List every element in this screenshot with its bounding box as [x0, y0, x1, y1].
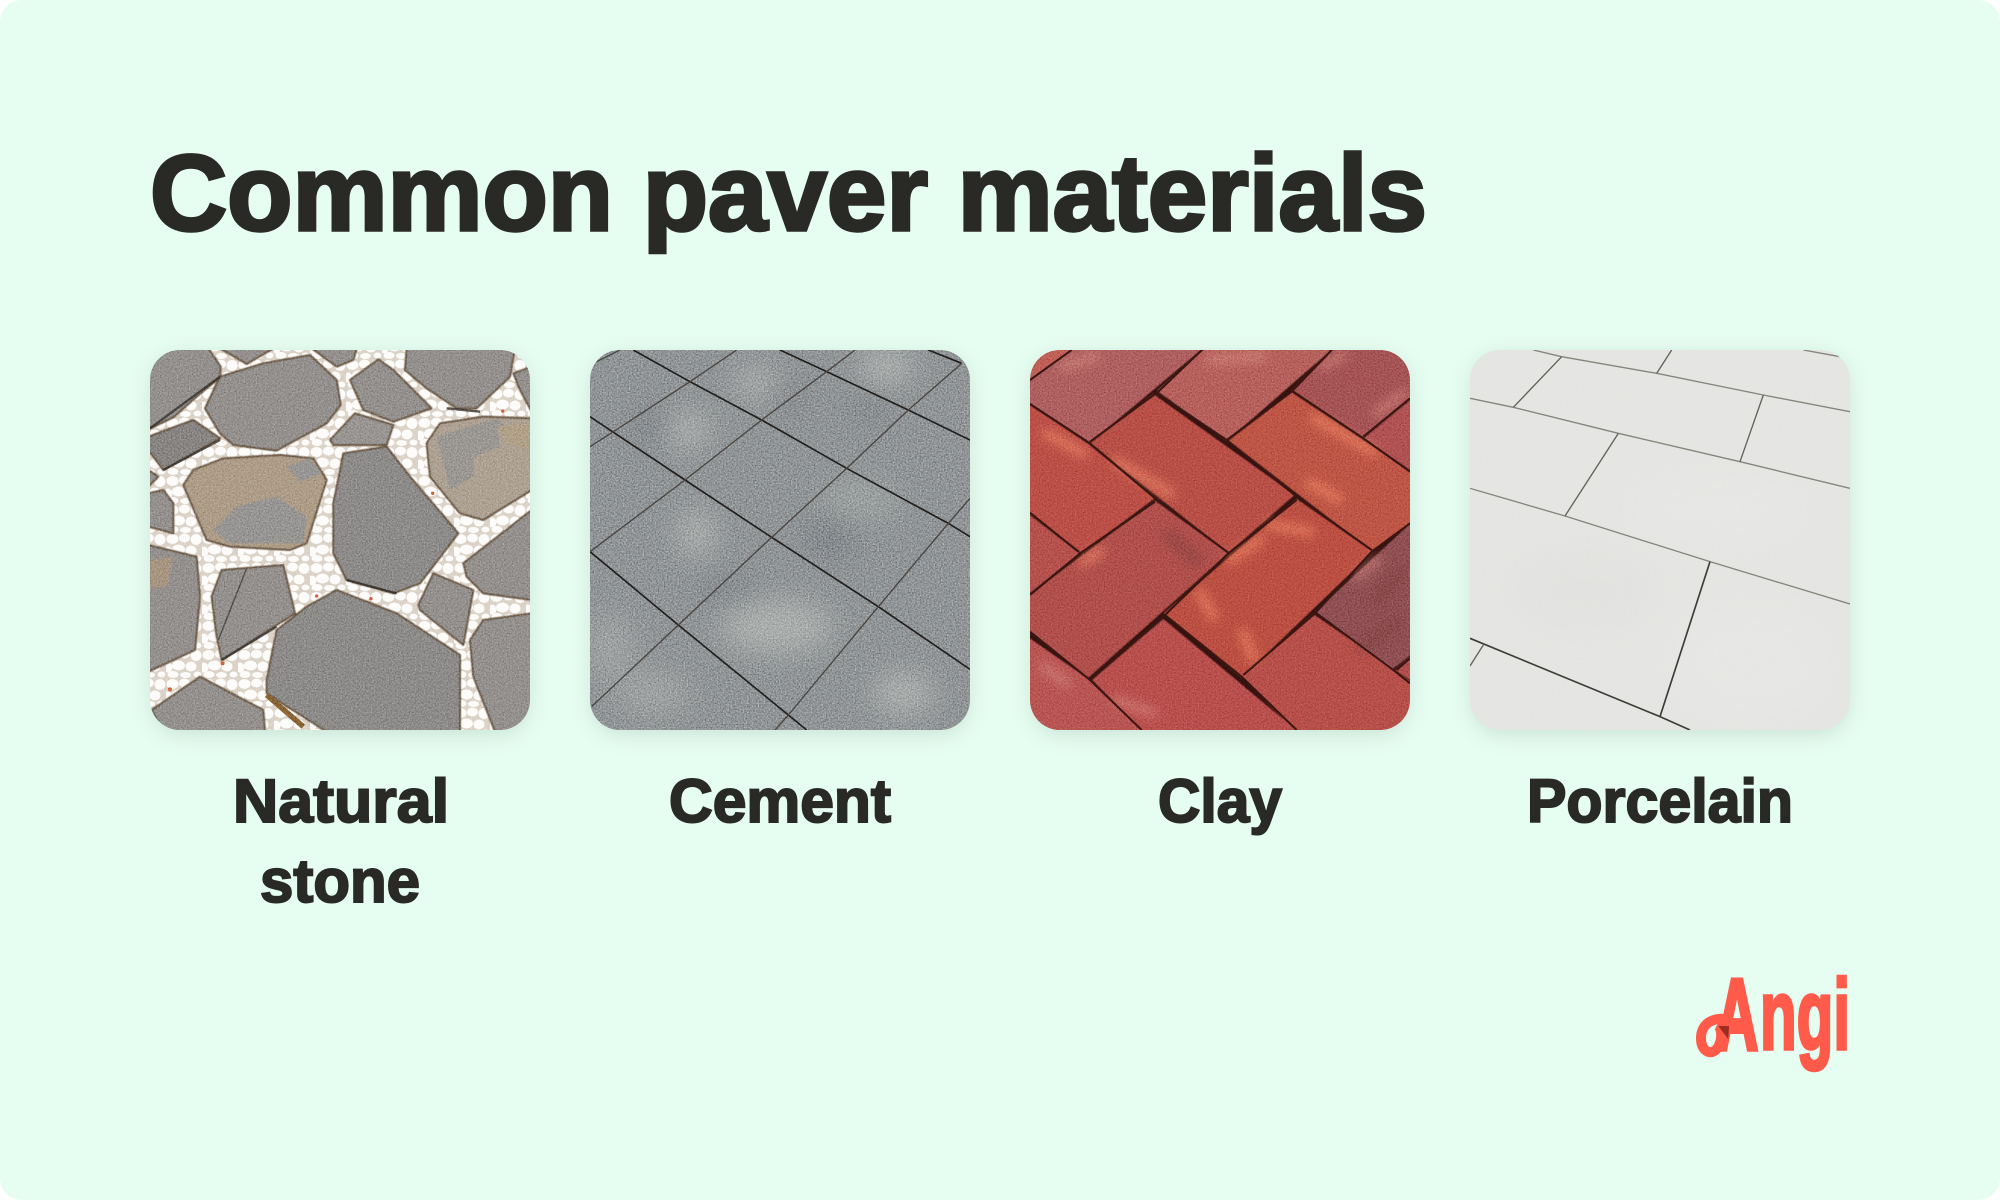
logo letters ngi: ngi: [1760, 959, 1850, 1071]
long joints: [1470, 350, 1850, 604]
stone colour patches: [151, 418, 528, 588]
short joints: [1470, 350, 1763, 730]
title: Common paver materials: [150, 132, 1427, 253]
logo letter A: A: [1716, 959, 1758, 1071]
photo: natural stone paving: [148, 348, 532, 732]
joints up-right: [590, 350, 970, 730]
panel: natural stone: [148, 348, 532, 734]
label: natural stone: stone: [260, 847, 420, 915]
gravel and fill accents: [168, 409, 504, 691]
label: natural stone: Natural: [233, 767, 449, 835]
panel: cement: [587, 350, 970, 734]
label: clay: Clay: [1158, 767, 1282, 835]
photo: cement paving: [587, 350, 970, 730]
brick highlights: [1043, 355, 1403, 713]
label: natural stone: [233, 767, 449, 915]
label: cement: Cement: [669, 767, 891, 835]
logo swash fold: [1718, 1026, 1729, 1039]
panel: porcelain: [1470, 350, 1850, 734]
logo: Angi: [1701, 959, 1850, 1071]
label: porcelain: Porcelain: [1527, 767, 1793, 835]
photo: porcelain paving: [1470, 350, 1850, 730]
joints down-right: [590, 350, 970, 730]
brick joints: [1030, 350, 1410, 730]
panel: clay: [1028, 348, 1412, 734]
photo: clay brick paving: [1028, 348, 1412, 732]
logo swash loop: [1701, 1019, 1730, 1052]
